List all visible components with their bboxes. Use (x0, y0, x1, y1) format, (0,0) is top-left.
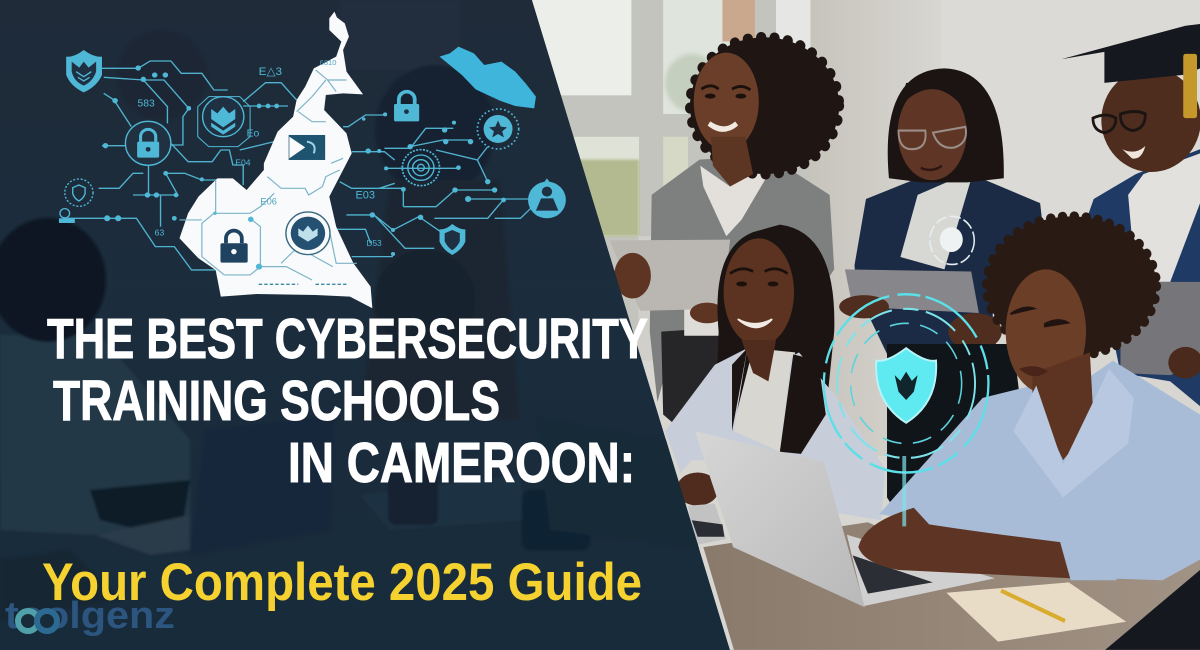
circuit labels: D53 (366, 239, 382, 248)
subtitle: Your Complete 2025 Guide (42, 553, 642, 612)
logo: toolgenz: toolgenz (5, 595, 175, 637)
person: woman in navy blazer with glasses (839, 68, 1042, 394)
typing arms and hands (858, 508, 1117, 580)
person: smiling woman with braids (665, 225, 885, 520)
icon: small hologram badge (930, 216, 974, 264)
map of Cameroon (179, 12, 372, 308)
circuit labels: E03 (355, 189, 375, 201)
map node labels (260, 58, 336, 206)
photo: students in classroom (531, 0, 1200, 650)
map internal circuit (179, 70, 357, 280)
circuit labels (137, 66, 382, 248)
circuit labels: E04 (235, 158, 251, 168)
title: THE BEST CYBERSECURITY (47, 307, 648, 371)
circuit nodes (103, 65, 506, 256)
icon: small shield dashed circle (65, 179, 93, 206)
circuit lines (68, 61, 531, 270)
circuit labels: E△3 (259, 66, 282, 78)
person: graduate with cap and glasses (1061, 24, 1200, 406)
icon: person badge (528, 178, 566, 218)
icon: star badge (477, 109, 519, 149)
title: IN CAMEROON: (288, 431, 635, 495)
icon: padlock top right (394, 92, 419, 121)
dark space behind hologram (887, 344, 1019, 522)
title: TRAINING SCHOOLS (53, 369, 500, 433)
icon: spiral dial (402, 150, 440, 186)
icon: padlock on map (220, 231, 248, 263)
faded background people and desk (0, 66, 700, 619)
title (47, 307, 648, 495)
circuit labels: Eo (247, 129, 260, 140)
icon: shield top left (66, 50, 102, 92)
cyber map illustration (59, 12, 566, 308)
circuit labels: 583 (137, 99, 155, 110)
table with laptops and notebook (688, 431, 1200, 650)
blue region shape (440, 47, 536, 108)
icon: shield lower right (440, 224, 465, 255)
icon: small device bottom left (59, 209, 75, 223)
laptop (695, 431, 995, 607)
notebook with pencil (946, 582, 1126, 642)
dark diagonal panel (0, 0, 730, 650)
map node labels: E06 (260, 196, 277, 206)
classroom wall and window (531, 0, 1200, 650)
icon: padlock in circle (125, 121, 171, 165)
person: standing woman in grey cardigan (610, 37, 839, 423)
person: woman with afro in blue shirt (879, 216, 1200, 580)
hologram shield (824, 294, 988, 526)
circuit labels: 63 (155, 228, 165, 238)
map node labels: 6810 (320, 58, 336, 67)
icon: emblem ring on map (286, 212, 330, 255)
icon: chevron shield in octagon (198, 97, 250, 147)
icon: play flag panel on map (289, 135, 325, 160)
